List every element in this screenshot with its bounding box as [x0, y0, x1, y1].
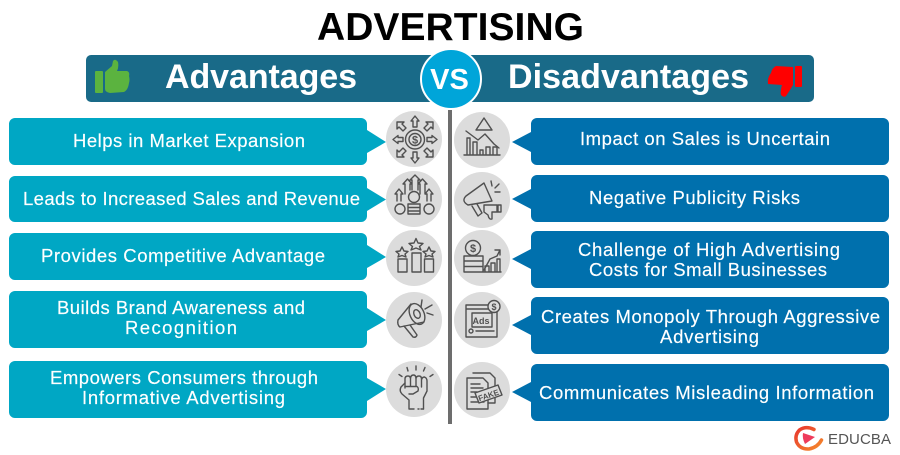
item: misleading information: Communicates Misleading Information — [539, 382, 874, 403]
panel: advantages list — [9, 118, 386, 418]
item: misleading information — [512, 364, 889, 421]
icon: high advertising costs — [454, 230, 510, 286]
item: high costs — [512, 231, 889, 288]
item: high costs: Challenge of High Advertising — [578, 239, 840, 260]
heading: advantages: Advantages — [165, 58, 357, 96]
title: ADVERTISING — [317, 6, 584, 49]
panel: disadvantages list — [512, 118, 889, 421]
icon: ads: Ads — [472, 316, 490, 326]
icon: market expansion: $ — [412, 134, 418, 146]
icon: ads — [454, 292, 510, 348]
center divider — [448, 110, 452, 424]
icon: high advertising costs: $ — [470, 243, 476, 255]
item: uncertain sales: Impact on Sales is Uncertain — [580, 128, 830, 149]
item: market expansion — [9, 118, 386, 165]
item: competitive advantage: Provides Competitive Advantage — [41, 245, 325, 266]
icon: thumbs up — [95, 60, 130, 93]
logo mark — [796, 428, 822, 449]
icon: rating bars — [386, 230, 442, 286]
item: negative publicity: Negative Publicity Risks — [589, 187, 800, 208]
item: brand awareness: Builds Brand Awareness and — [57, 297, 305, 318]
item: increased sales: Leads to Increased Sales and Revenue — [23, 188, 360, 209]
item: negative publicity — [512, 175, 889, 222]
logo wordmark: EDUCBA — [828, 431, 891, 448]
icon: negative publicity megaphone — [454, 172, 510, 228]
item: competitive advantage — [9, 233, 386, 280]
heading: disadvantages: Disadvantages — [508, 58, 749, 96]
vs badge — [421, 49, 481, 109]
icon: ads: $ — [491, 302, 497, 312]
item: brand awareness: Recognition — [125, 317, 237, 338]
item: increased sales — [9, 176, 386, 222]
item: high costs: Costs for Small Businesses — [589, 259, 827, 280]
icon: raised fist — [386, 361, 442, 417]
icon: thumbs down — [768, 66, 802, 97]
icon: megaphone — [386, 292, 442, 348]
header band — [86, 55, 814, 102]
icon: fake documents — [454, 362, 510, 418]
item: monopoly: Advertising — [660, 326, 759, 347]
icon: market expansion — [386, 111, 442, 167]
item: empowers consumers: Informative Advertising — [82, 387, 285, 408]
item: uncertain sales — [512, 118, 889, 165]
item: monopoly: Creates Monopoly Through Aggressive — [541, 306, 880, 327]
icon: sales growth — [386, 171, 442, 227]
vs badge: VS — [430, 64, 469, 96]
icon: fake documents: FAKE — [477, 388, 501, 403]
item: monopoly — [512, 297, 889, 354]
item: market expansion: Helps in Market Expansion — [73, 130, 305, 151]
logo: educba — [796, 428, 891, 449]
item: empowers consumers — [9, 361, 386, 418]
icon: uncertain sales chart — [454, 112, 510, 168]
item: brand awareness — [9, 291, 386, 348]
item: empowers consumers: Empowers Consumers through — [50, 367, 318, 388]
